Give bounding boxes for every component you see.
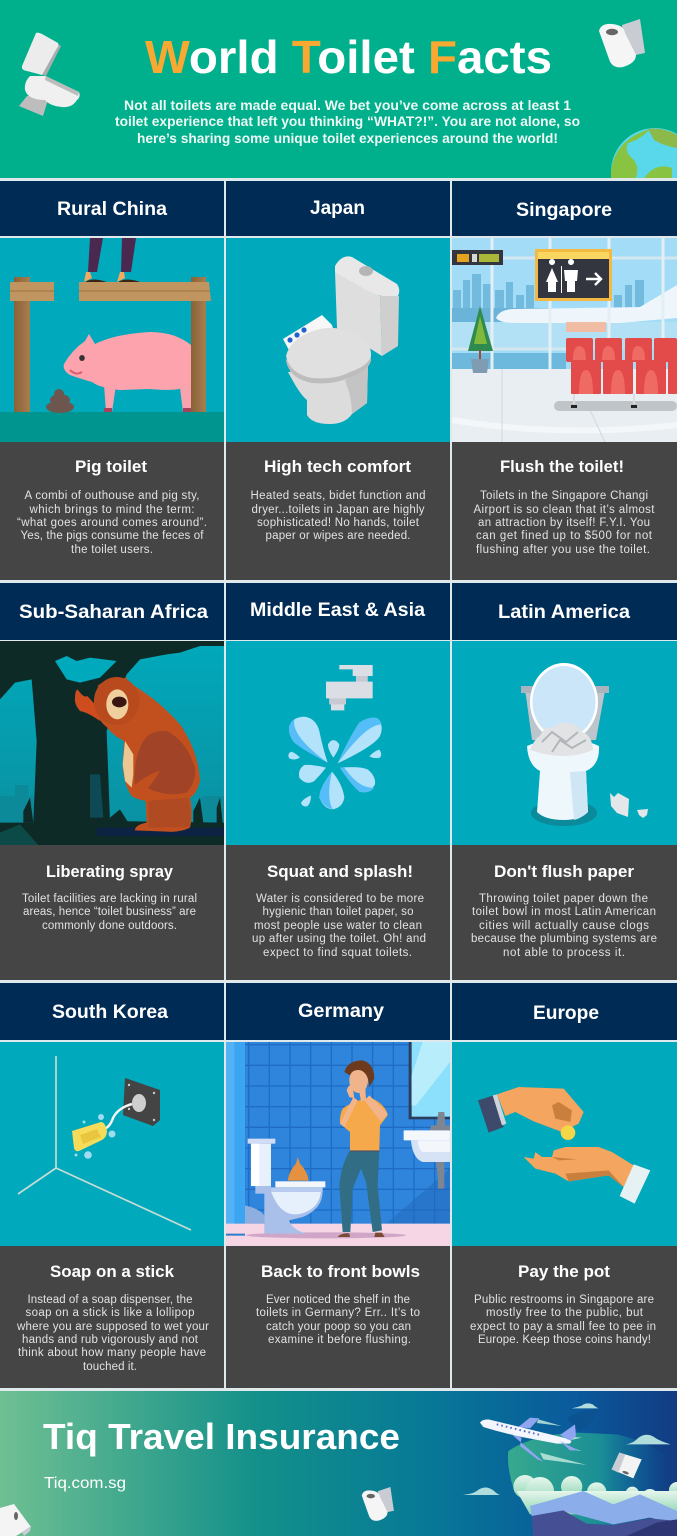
- illustration: hands passing a coin: [452, 1042, 677, 1246]
- icon: toilet paper roll top right: [599, 19, 645, 67]
- body text: Throwing toilet paper down the: [479, 893, 648, 905]
- illustration: soap on a stick: [0, 1042, 224, 1246]
- icon: globe: [611, 128, 677, 178]
- body text: mostly free to the public, but: [486, 1307, 644, 1319]
- icon: toilet paper rolls: [0, 1487, 394, 1536]
- illustration: bear and tree: [0, 641, 224, 845]
- illustration: high tech toilet: [226, 238, 450, 442]
- body text: an attraction by itself! F.Y.I. You: [478, 517, 650, 529]
- body text: not able to process it.: [503, 947, 625, 959]
- body text: dryer...toilets in Japan are highly: [252, 504, 425, 516]
- heading: Europe: [533, 1003, 599, 1024]
- body text: [471, 893, 657, 959]
- body text: can get fined up to $500 for not: [476, 530, 653, 542]
- body text: [250, 490, 426, 542]
- illustration: toilet with crumpled paper: [452, 641, 677, 845]
- heading: South Korea: [52, 1002, 168, 1023]
- panel: Sub-Saharan Africa: [0, 583, 224, 980]
- heading: Rural China: [57, 199, 167, 220]
- body text: [252, 893, 426, 959]
- body text: expect to find squat toilets.: [263, 947, 412, 959]
- heading: Sub-Saharan Africa: [19, 602, 208, 623]
- body text: A combi of outhouse and pig sty,: [24, 490, 200, 502]
- subheading: High tech comfort: [264, 458, 412, 476]
- intro text: [115, 97, 580, 146]
- heading: Japan: [310, 198, 365, 219]
- subheading: Soap on a stick: [50, 1263, 175, 1281]
- body text: areas, hence “toilet business” are: [23, 906, 196, 918]
- body text: hygienic than toilet paper, so: [262, 906, 414, 918]
- header banner: [0, 0, 677, 178]
- subheading: Squat and splash!: [267, 863, 413, 881]
- body text: Instead of a soap dispenser, the: [28, 1294, 192, 1306]
- body text: toilet bowl in most Latin American: [472, 906, 656, 918]
- heading: Middle East & Asia: [250, 600, 425, 621]
- body text: Toilets in the Singapore Changi: [480, 490, 648, 502]
- body text: Public restrooms in Singapore are: [474, 1294, 654, 1306]
- intro text: here’s sharing some unique toilet experiences around the world!: [137, 130, 558, 146]
- body text: examine it before flushing.: [268, 1334, 411, 1346]
- panel: Europe: [452, 983, 677, 1388]
- body text: up after using the toilet. Oh! and: [252, 933, 426, 945]
- body text: because the plumbing systems are: [471, 933, 657, 945]
- subheading: Pig toilet: [75, 458, 148, 476]
- body text: think about how many people have: [18, 1347, 206, 1359]
- body text: [474, 490, 655, 556]
- panel: Singapore: [452, 181, 677, 580]
- subheading: Pay the pot: [518, 1263, 611, 1281]
- subheading: Back to front bowls: [261, 1263, 420, 1281]
- body text: toilets in Germany? Err.. It’s to: [256, 1307, 420, 1319]
- body text: flushing after you use the toilet.: [476, 544, 650, 556]
- body text: catch your poop so you can: [266, 1321, 411, 1333]
- body text: most people use water to clean: [254, 920, 422, 932]
- panel: Latin America: [452, 583, 677, 980]
- illustration: pig toilet: [0, 238, 224, 442]
- body text: Toilet facilities are lacking in rural: [22, 893, 197, 905]
- heading: Latin America: [498, 602, 630, 623]
- panel: South Korea: [0, 983, 224, 1388]
- panel: Germany: [226, 983, 450, 1388]
- body text: Heated seats, bidet function and: [250, 490, 426, 502]
- body text: Airport is so clean that it’s almost: [474, 504, 655, 516]
- heading: Germany: [298, 1001, 384, 1022]
- illustration: faucet and water splash: [226, 641, 450, 845]
- body text: [22, 893, 197, 932]
- body text: paper or wipes are needed.: [266, 530, 410, 542]
- subheading: Flush the toilet!: [500, 458, 624, 476]
- body text: [17, 490, 207, 556]
- illustration: plane, hills, clouds and mountains: [463, 1403, 677, 1536]
- intro text: toilet experience that left you thinking “WHAT?!”. You are not alone, so: [115, 113, 580, 129]
- panel: Middle East & Asia: [226, 583, 450, 980]
- body text: “what goes around comes around”.: [17, 517, 207, 529]
- body text: where you are supposed to wet your: [16, 1321, 209, 1333]
- body text: Water is considered to be more: [256, 893, 424, 905]
- body text: hands and rub vigorously and not: [22, 1334, 199, 1346]
- website: Tiq.com.sg: [44, 1475, 126, 1492]
- subheading: Don't flush paper: [494, 863, 635, 881]
- body text: [16, 1294, 209, 1373]
- body text: [256, 1294, 420, 1346]
- panel: Rural China: [0, 181, 224, 580]
- body text: [470, 1294, 656, 1346]
- body text: Yes, the pigs consume the feces of: [20, 530, 204, 542]
- footer title: Tiq Travel Insurance: [43, 1416, 400, 1457]
- heading: Singapore: [516, 200, 612, 221]
- body text: expect to pay a small fee to pee in: [470, 1321, 656, 1333]
- body text: cities will actually cause clogs: [479, 920, 649, 932]
- body text: commonly done outdoors.: [42, 920, 177, 932]
- title: World Toilet Facts: [145, 31, 552, 83]
- illustration: bathroom with man and toilet: [226, 1042, 450, 1246]
- body text: touched it.: [83, 1361, 137, 1373]
- body text: Europe. Keep those coins handy!: [478, 1334, 651, 1346]
- subheading: Liberating spray: [46, 863, 174, 881]
- body text: sophisticated! No hands, toilet: [257, 517, 420, 529]
- panel: Japan: [226, 181, 450, 580]
- intro text: Not all toilets are made equal. We bet you’ve come across at least 1: [124, 97, 571, 113]
- footer banner: [0, 1391, 677, 1536]
- body text: the toilet users.: [71, 544, 153, 556]
- body text: Ever noticed the shelf in the: [266, 1294, 410, 1306]
- icon: toilet top left: [19, 33, 80, 116]
- body text: which brings to mind the term:: [28, 504, 194, 516]
- body text: soap on a stick is like a lollipop: [26, 1307, 194, 1319]
- illustration: airport: [452, 238, 677, 442]
